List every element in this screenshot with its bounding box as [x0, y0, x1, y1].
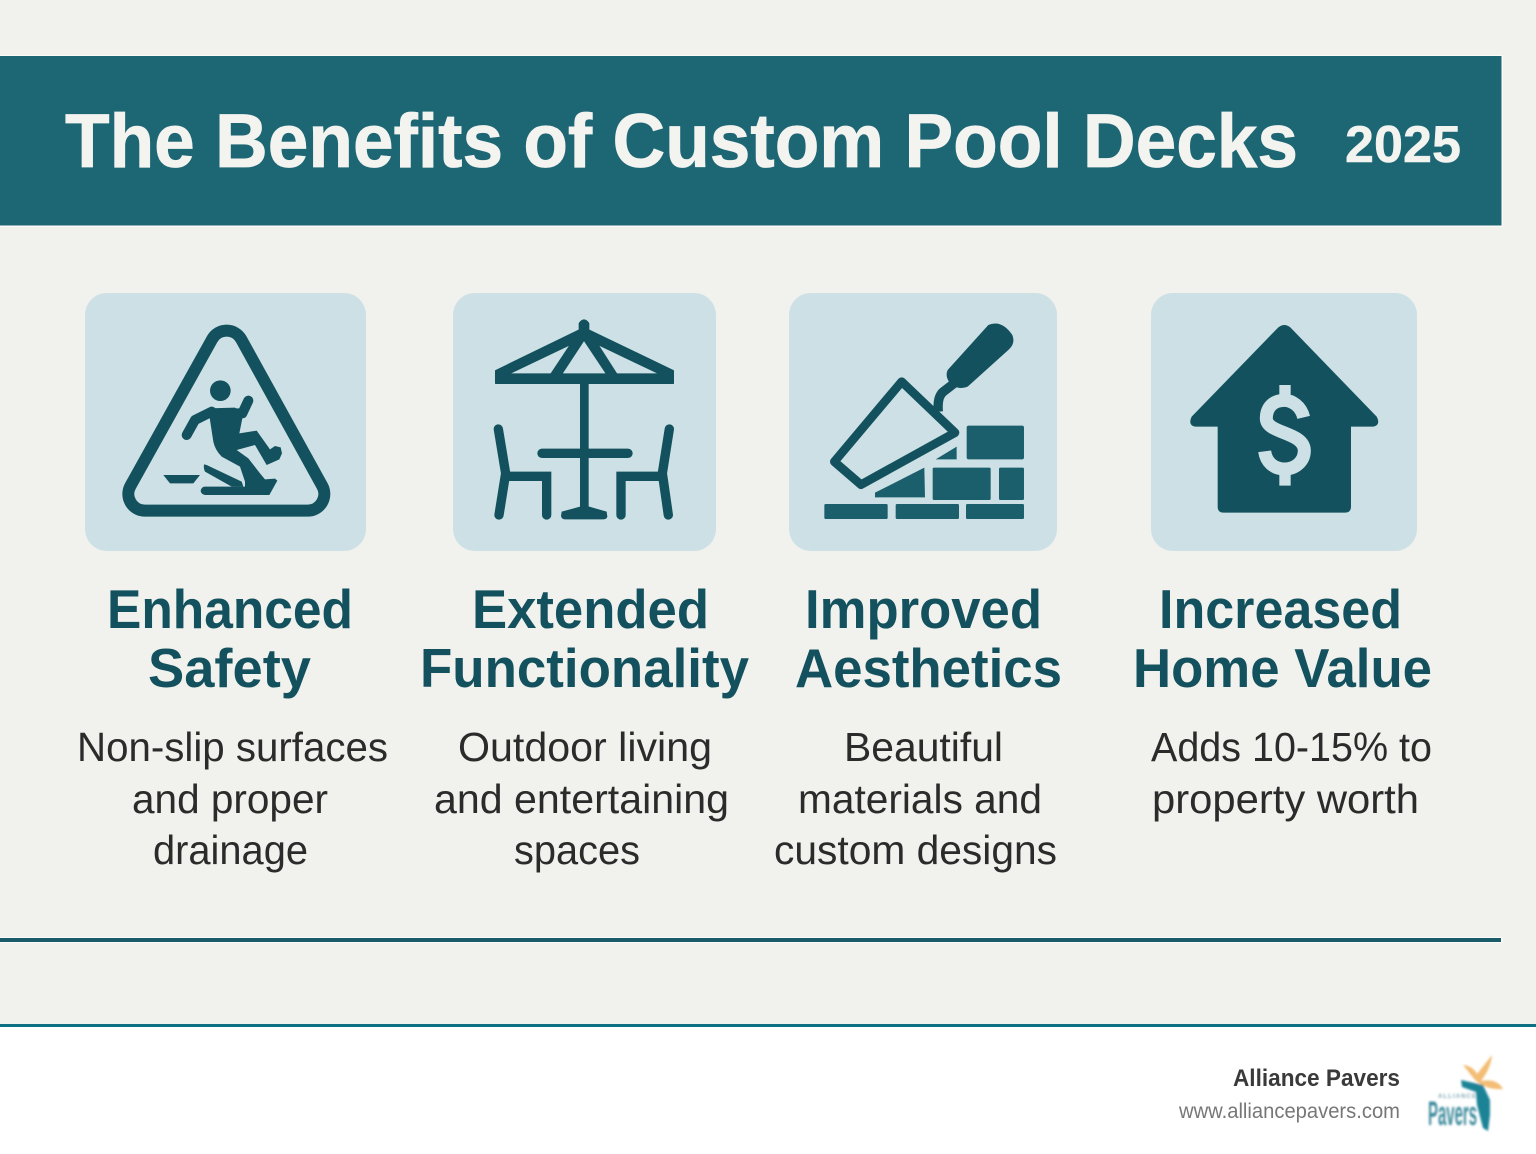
description: [77, 724, 388, 873]
description: property worth: [1152, 776, 1419, 822]
icon: trowel and bricks: [789, 293, 1057, 551]
icon: patio umbrella table and chairs: [453, 293, 716, 551]
heading: [1133, 578, 1432, 699]
icon: slipping person warning sign: [85, 293, 366, 551]
description: Non-slip surfaces: [77, 724, 388, 770]
heading: Improved: [805, 578, 1042, 640]
heading: Safety: [148, 637, 311, 699]
heading: [420, 578, 749, 699]
description: [1151, 724, 1432, 822]
description: [434, 724, 729, 873]
description: spaces: [514, 827, 640, 873]
heading: Increased: [1159, 578, 1402, 640]
heading: Home Value: [1133, 637, 1432, 699]
description: custom designs: [774, 827, 1057, 873]
description: Adds 10-15% to: [1151, 724, 1432, 770]
panel: improved aesthetics: [774, 293, 1062, 873]
header banner: [0, 55, 1503, 227]
logo: [1428, 1055, 1503, 1133]
logo: ALLIANCE: [1438, 1094, 1476, 1100]
description: [774, 724, 1057, 873]
description: Beautiful: [844, 724, 1003, 770]
description: drainage: [153, 827, 308, 873]
description: materials and: [798, 776, 1042, 822]
panel: extended functionality: [420, 293, 749, 873]
heading: Enhanced: [107, 578, 353, 640]
panel: increased home value: [1133, 293, 1432, 822]
footer: [0, 1024, 1536, 1154]
heading: Extended: [472, 578, 709, 640]
description: Outdoor living: [458, 724, 712, 770]
icon: house with dollar sign: [1151, 293, 1417, 551]
heading: Aesthetics: [795, 637, 1062, 699]
description: and entertaining: [434, 776, 729, 822]
heading: Functionality: [420, 637, 749, 699]
year: 2025: [1345, 116, 1461, 174]
panel: enhanced safety: [77, 293, 388, 873]
title: The Benefits of Custom Pool Decks: [65, 99, 1298, 184]
brand name: Alliance Pavers: [1233, 1065, 1400, 1092]
heading: [107, 578, 353, 699]
description: and proper: [132, 776, 328, 822]
website: www.alliancepavers.com: [1178, 1100, 1400, 1123]
heading: [795, 578, 1062, 699]
